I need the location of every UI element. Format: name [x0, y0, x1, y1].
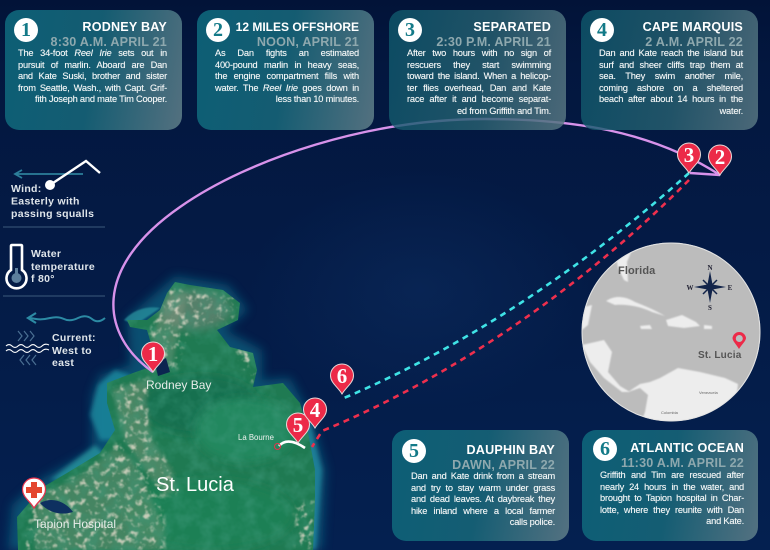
map pin St. Lucia: [732, 332, 746, 349]
wind legend: [11, 161, 100, 220]
body text: ter flies overhead, Dan and Kate: [407, 82, 551, 92]
heading: CAPE MARQUIS: [643, 20, 743, 34]
badge 4: [590, 18, 614, 42]
badge 5: [402, 439, 426, 463]
map label St. Lucia: St. Lucia: [698, 350, 742, 361]
badge 3: 3: [405, 19, 415, 41]
body text: Dan and Kate drink from a stream: [411, 471, 555, 481]
island of St. Lucia: [0, 270, 330, 550]
panel 3: Separated: [389, 10, 566, 130]
body text: toward the island. When a helicop-: [407, 71, 551, 81]
current legend: Current:: [52, 332, 96, 344]
heading: SEPARATED: [473, 20, 551, 34]
water temperature legend: [7, 245, 95, 288]
body text: 400-pound marlin in heavy seas,: [215, 60, 359, 70]
current legend: east: [52, 357, 74, 369]
panel 2: 12 Miles Offshore: [197, 10, 374, 130]
body text: Griffith and Tim are rescued after: [600, 470, 744, 480]
pin 2: [708, 145, 732, 175]
body text: less than 10 minutes.: [276, 94, 359, 104]
badge 6: 6: [600, 438, 610, 460]
body text: the engine compartment fills with: [215, 71, 359, 81]
panel 4: Cape Marquis: [581, 10, 758, 130]
pin 6: [330, 364, 354, 394]
water temperature legend: Water: [31, 248, 61, 260]
badge 2: 2: [213, 19, 223, 41]
body text: pursuit of marlin. Aboard are Dan: [18, 60, 167, 70]
heading: 12 MILES OFFSHORE: [236, 20, 359, 34]
body text: The 34-foot Reel Irie sets out in: [18, 48, 167, 58]
time: 2:30 P.M. APRIL 21: [436, 35, 551, 49]
body text: and try to stay warm under grass: [411, 482, 555, 492]
compass rose: W: [686, 284, 694, 292]
body text: calls police.: [510, 517, 555, 527]
wind legend: passing squalls: [11, 208, 94, 220]
body text: and Kate.: [706, 516, 744, 526]
label: La Bourne: La Bourne: [238, 433, 274, 442]
pin 5: [286, 413, 310, 443]
badge 1: 1: [21, 19, 31, 41]
body text: hike inland where a local farmer: [411, 506, 555, 516]
body text: [600, 470, 744, 526]
wind legend: Easterly with: [11, 196, 80, 208]
pin 1: [142, 342, 164, 372]
body text: [214, 48, 359, 104]
body text: brought to Tapion hospital in Char-: [600, 493, 744, 503]
pin 5: 5: [293, 413, 303, 437]
body text: water.: [720, 106, 743, 116]
map label Colombia: Colombia: [661, 410, 679, 415]
water temperature legend: f 80°: [31, 273, 55, 285]
route: boat path to sinking site: [113, 119, 720, 372]
time: 11:30 A.M. APRIL 22: [621, 456, 744, 470]
route: Dan and Kate, dashed red: [312, 180, 689, 447]
body text: water. The Reel Irie goes down in: [215, 82, 359, 92]
harbour bays: [40, 500, 73, 514]
label: Tapion Hospital: Tapion Hospital: [34, 517, 116, 531]
badge 4: 4: [597, 19, 607, 41]
pin 3: [678, 143, 700, 173]
pin 3: 3: [684, 143, 694, 167]
body text: race after it and become separat-: [407, 94, 551, 104]
compass rose: E: [728, 284, 733, 292]
pin 4: [304, 398, 326, 428]
map label Florida: Florida: [618, 265, 656, 277]
badge 2: [206, 18, 230, 42]
body text: Dan and Kate reach the island but: [599, 48, 743, 58]
body text: nearly 24 hours in the water, and: [600, 482, 744, 492]
map label Venezuela: Venezuela: [699, 390, 718, 395]
body text: and dead leaves. At daybreak they: [411, 494, 555, 504]
badge 6: [593, 437, 617, 461]
label: St. Lucia: St. Lucia: [156, 474, 235, 496]
badge 5: 5: [409, 440, 419, 462]
wind legend: Wind:: [11, 183, 42, 195]
pin 2: 2: [715, 145, 725, 169]
time: 8:30 A.M. APRIL 21: [50, 35, 167, 49]
panel 1: Rodney Bay: [5, 10, 182, 130]
badge 3: [398, 18, 422, 42]
body text: After two hours with no sign of: [407, 48, 551, 58]
body text: beach after about 14 hours in the: [599, 94, 743, 104]
water temperature legend: temperature: [31, 261, 95, 273]
time: 2 A.M. APRIL 22: [645, 35, 743, 49]
time: NOON, APRIL 21: [257, 35, 359, 49]
body text: As Dan fights an estimated: [215, 48, 359, 58]
body text: [18, 48, 168, 104]
panel 5: Dauphin Bay: [392, 430, 569, 541]
panel 6: Atlantic Ocean: [582, 430, 758, 541]
body text: fith Joseph and mate Tim Cooper.: [35, 94, 167, 104]
body text: [599, 48, 744, 116]
pin 4: 4: [310, 398, 321, 422]
body text: rescuers they start swimming: [407, 60, 551, 70]
locator map: [580, 242, 760, 425]
current legend: [6, 313, 105, 369]
body text: [406, 48, 552, 116]
body text: sea. They swim another mile,: [599, 71, 743, 81]
heading: RODNEY BAY: [82, 20, 167, 34]
body text: coming ashore on a sheltered: [599, 82, 743, 92]
compass rose: [686, 264, 733, 312]
body text: ed from Griffith and Tim.: [457, 106, 551, 116]
body text: [411, 471, 556, 528]
inland walk to La Bourne: [274, 442, 305, 450]
body text: and Kate Suski, brother and sister: [18, 71, 167, 81]
pin 6: 6: [337, 364, 347, 388]
heading: ATLANTIC OCEAN: [630, 441, 744, 455]
current legend: West to: [52, 345, 92, 357]
compass rose: N: [707, 264, 713, 272]
time: DAWN, APRIL 22: [452, 458, 555, 472]
body text: surf and sheer cliffs trap them at: [599, 60, 743, 70]
body text: lotte, where they reunite with Dan: [600, 504, 744, 514]
body text: from Seattle, Wash., with Capt. Grif-: [18, 82, 167, 92]
compass rose: S: [708, 304, 712, 312]
route: Griffith and Tim, dashed cyan: [344, 173, 689, 398]
pin 1: 1: [148, 342, 158, 366]
badge 1: [14, 18, 38, 42]
pin: hospital: [22, 478, 46, 508]
heading: DAUPHIN BAY: [466, 443, 555, 457]
label: Rodney Bay: Rodney Bay: [146, 378, 211, 392]
